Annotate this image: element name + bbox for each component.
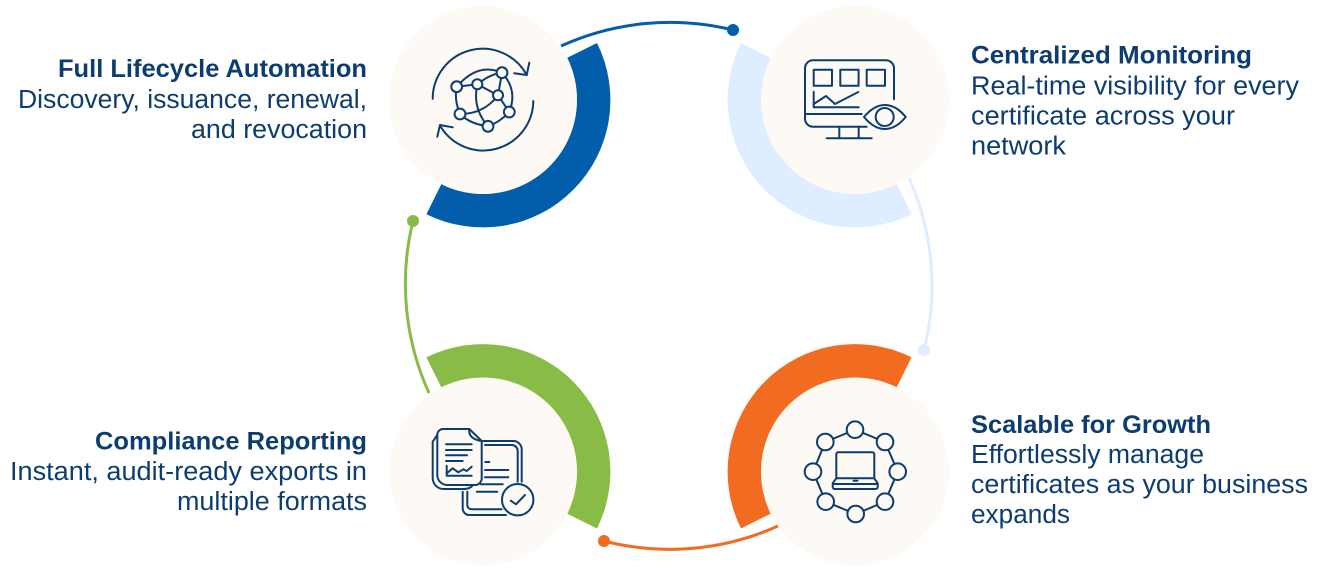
ring segment: light blue bbox=[728, 43, 912, 227]
connector arrow: light blue bbox=[909, 178, 932, 356]
text: compliance reporting: Compliance Reporting bbox=[95, 428, 367, 456]
text: full lifecycle automation: Full Lifecycle Automation bbox=[58, 55, 367, 83]
text: centralized monitoring: Real-time visibility for every bbox=[971, 72, 1299, 100]
text: scalable for growth: certificates as your business bbox=[971, 471, 1308, 499]
text: centralized monitoring: certificate across your bbox=[971, 102, 1236, 130]
text: scalable for growth: expands bbox=[971, 501, 1070, 529]
icon: globe network with refresh arrows bbox=[433, 49, 533, 151]
icon: laptop with connected nodes bbox=[805, 421, 906, 522]
panel: scalable for growth bbox=[598, 344, 1308, 566]
text: full lifecycle automation bbox=[18, 55, 367, 144]
ring segment: green bbox=[426, 344, 610, 528]
text: centralized monitoring: network bbox=[971, 132, 1066, 160]
panel: compliance reporting bbox=[10, 215, 610, 566]
icon disc: cream bbox=[389, 6, 577, 194]
text: centralized monitoring: Centralized Monitoring bbox=[971, 42, 1252, 70]
text: compliance reporting: multiple formats bbox=[177, 488, 367, 516]
connector arrow: blue bbox=[561, 22, 739, 46]
icon: documents with check mark bbox=[433, 429, 533, 515]
panel: full lifecycle automation bbox=[18, 6, 739, 227]
ring segment: blue bbox=[426, 43, 610, 227]
ring segment: orange bbox=[728, 344, 912, 528]
text: full lifecycle automation: Discovery, issuance, renewal, bbox=[18, 86, 367, 114]
icon disc: cream bbox=[761, 378, 949, 566]
connector arrow: green bbox=[405, 215, 429, 393]
icon: monitor with eye bbox=[805, 60, 906, 138]
text: scalable for growth: Scalable for Growth bbox=[971, 411, 1211, 439]
connector arrow: orange bbox=[598, 526, 778, 549]
text: scalable for growth: Effortlessly manage bbox=[971, 441, 1204, 469]
panel: centralized monitoring bbox=[728, 6, 1299, 356]
icon disc: cream bbox=[389, 378, 577, 566]
text: scalable for growth bbox=[971, 411, 1308, 529]
icon disc: cream bbox=[761, 6, 949, 194]
text: centralized monitoring bbox=[971, 42, 1299, 160]
text: full lifecycle automation: and revocation bbox=[191, 116, 367, 144]
text: compliance reporting bbox=[10, 428, 367, 516]
text: compliance reporting: Instant, audit-ready exports in bbox=[10, 458, 367, 486]
